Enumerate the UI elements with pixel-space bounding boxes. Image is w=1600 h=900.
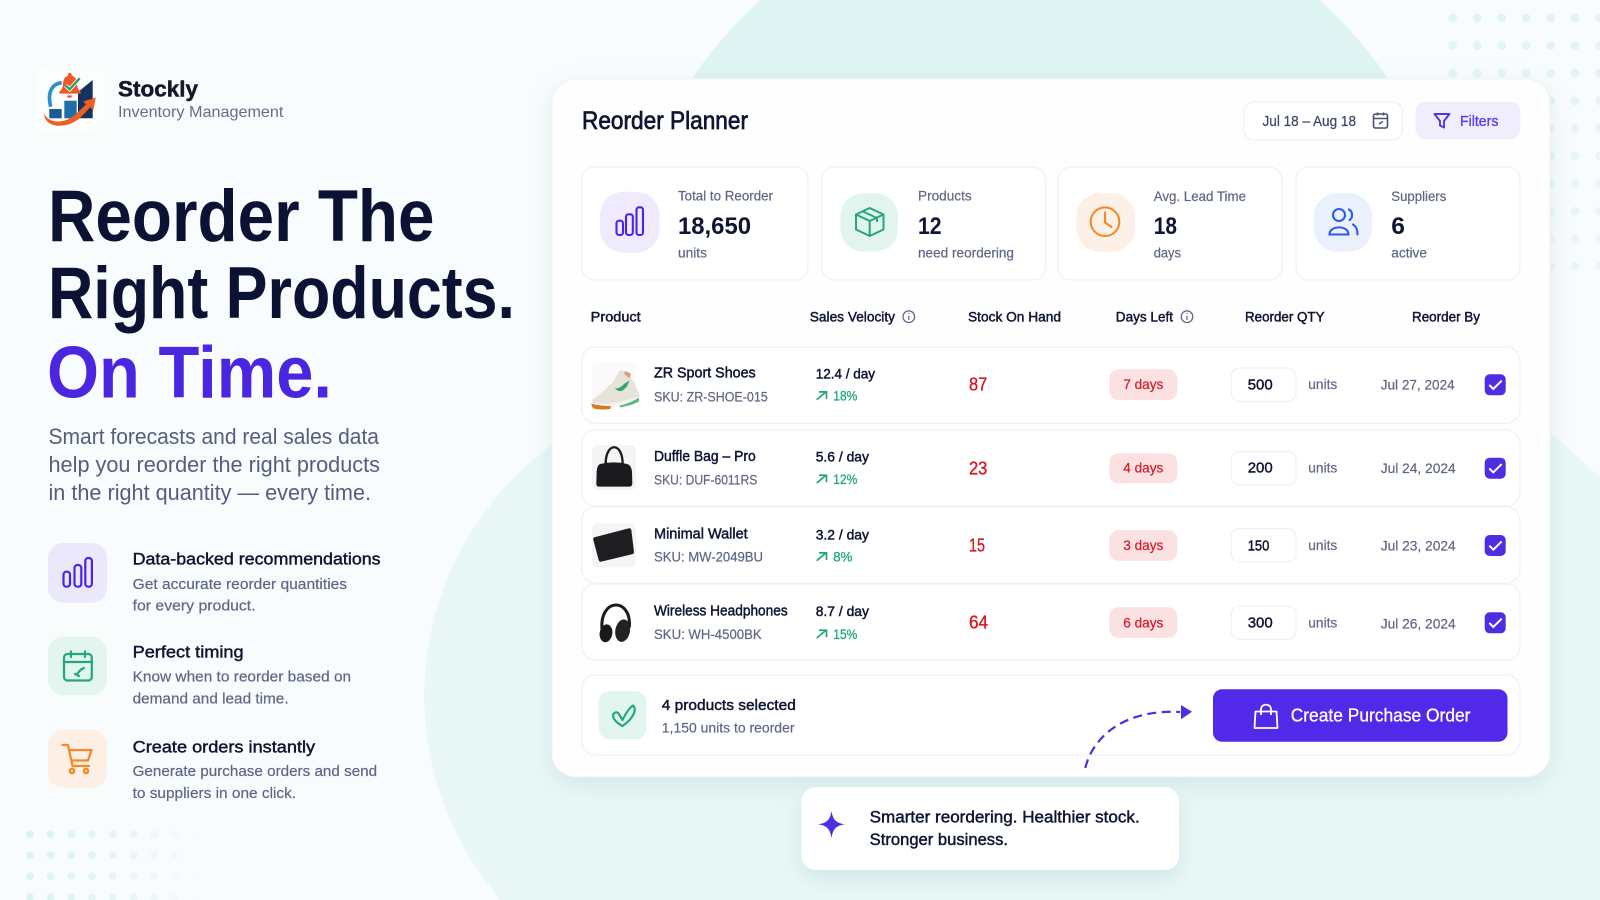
table row: Minimal Wallet: units bbox=[1308, 537, 1337, 553]
quantity input: 300 bbox=[1248, 614, 1273, 631]
headline: Reorder The bbox=[48, 174, 434, 257]
icon: info bbox=[903, 311, 915, 323]
stat card: average lead time bbox=[1058, 167, 1282, 280]
stat card: suppliers: Suppliers bbox=[1391, 189, 1447, 204]
panel: reorder planner bbox=[552, 79, 1550, 870]
table row: Minimal Wallet: Minimal Wallet bbox=[654, 526, 748, 542]
days left badge: 6 days bbox=[1123, 614, 1163, 630]
table header: Stock On Hand bbox=[968, 309, 1061, 325]
button: create purchase order: Create Purchase Order bbox=[1291, 706, 1470, 726]
intro paragraph: Smart forecasts and real sales data bbox=[48, 424, 380, 449]
table row: Wireless Headphones: SKU: WH-4500BK bbox=[654, 627, 762, 642]
brand name: Stockly bbox=[118, 77, 198, 102]
intro paragraph bbox=[48, 424, 380, 505]
stat card: total to reorder: units bbox=[678, 245, 707, 260]
table row: Minimal Wallet: 3.2 / day bbox=[816, 526, 869, 542]
table row: Wireless Headphones bbox=[582, 584, 1520, 660]
icon: calendar tile bbox=[48, 637, 107, 695]
stat card: suppliers: 6 bbox=[1391, 213, 1405, 240]
dot pattern: top right bbox=[1448, 14, 1600, 270]
icon: clock bbox=[1076, 193, 1135, 252]
icon: funnel bbox=[1434, 114, 1450, 128]
feature description: Get accurate reorder quantities bbox=[133, 576, 347, 593]
stat card: suppliers: active bbox=[1391, 245, 1427, 260]
table row: Wireless Headphones: 64 bbox=[969, 612, 988, 632]
logo tile bbox=[36, 66, 104, 132]
feature description bbox=[133, 576, 347, 615]
table row: Duffle Bag - Pro: Jul 24, 2024 bbox=[1381, 460, 1456, 476]
trend up: 8% bbox=[833, 549, 852, 565]
feature description: demand and lead time. bbox=[133, 690, 289, 707]
icon: info bbox=[1181, 311, 1193, 323]
table row: Minimal Wallet: Jul 23, 2024 bbox=[1381, 537, 1456, 553]
days left badge bbox=[1109, 453, 1177, 483]
quantity input bbox=[1231, 452, 1296, 485]
table header bbox=[591, 309, 1480, 325]
callout: smarter reordering bbox=[802, 787, 1179, 870]
icon: bar chart tile bbox=[48, 543, 107, 603]
button: create purchase order bbox=[1213, 689, 1508, 742]
callout text bbox=[870, 809, 1140, 849]
table row: Duffle Bag - Pro: 23 bbox=[969, 458, 987, 478]
table row: Duffle Bag - Pro bbox=[582, 430, 1520, 506]
table row: Wireless Headphones: Jul 26, 2024 bbox=[1381, 615, 1456, 631]
feature: perfect timing bbox=[48, 637, 351, 707]
icon: box bbox=[840, 193, 898, 252]
table header: Sales Velocity bbox=[810, 309, 895, 325]
trend up bbox=[817, 471, 857, 487]
checkbox bbox=[1485, 374, 1506, 395]
filters button bbox=[1415, 102, 1520, 139]
stat card: average lead time: 18 bbox=[1154, 213, 1177, 240]
table row: ZR Sport Shoes bbox=[582, 347, 1520, 423]
icon: bar chart bbox=[600, 192, 660, 253]
feature description bbox=[133, 669, 351, 707]
brand tagline: Inventory Management bbox=[118, 104, 284, 121]
table row: ZR Sport Shoes: 12.4 / day bbox=[816, 365, 875, 381]
callout text: Smarter reordering. Healthier stock. bbox=[870, 809, 1140, 827]
stat card: products bbox=[822, 167, 1046, 280]
feature description bbox=[133, 763, 377, 802]
feature description: to suppliers in one click. bbox=[133, 785, 296, 802]
table row: ZR Sport Shoes: 87 bbox=[969, 375, 987, 395]
arrow: dashed to purchase button bbox=[1085, 705, 1192, 768]
days left badge: 4 days bbox=[1123, 459, 1163, 475]
stat card: products: 12 bbox=[918, 213, 942, 240]
quantity input bbox=[1231, 368, 1296, 401]
days left badge bbox=[1109, 530, 1177, 561]
stat card: total to reorder: 18,650 bbox=[678, 213, 751, 240]
intro paragraph: help you reorder the right products bbox=[48, 452, 380, 477]
icon: shopping bag bbox=[1254, 705, 1278, 728]
table row: Minimal Wallet bbox=[582, 507, 1520, 583]
table row: Wireless Headphones: units bbox=[1308, 614, 1337, 630]
table row: Minimal Wallet: 15 bbox=[969, 536, 985, 556]
icon: sparkle bbox=[818, 811, 845, 838]
checkbox bbox=[1485, 612, 1506, 633]
table row: ZR Sport Shoes: Jul 27, 2024 bbox=[1381, 376, 1455, 392]
table header: Reorder By bbox=[1412, 309, 1480, 325]
feature description: Know when to reorder based on bbox=[133, 669, 351, 686]
feature description: Generate purchase orders and send bbox=[133, 763, 377, 780]
days left badge: 7 days bbox=[1123, 376, 1163, 392]
trend up bbox=[817, 388, 857, 404]
headline bbox=[47, 174, 515, 414]
table row: Duffle Bag - Pro: 5.6 / day bbox=[816, 449, 869, 465]
feature title: Data-backed recommendations bbox=[133, 549, 381, 568]
panel card bbox=[552, 79, 1550, 777]
headline: On Time. bbox=[47, 330, 332, 414]
quantity input: 500 bbox=[1248, 376, 1273, 393]
icon: people bbox=[1314, 193, 1372, 252]
selection summary bar: 4 products selected bbox=[662, 698, 796, 714]
product image: wallet bbox=[592, 523, 636, 567]
table row: Duffle Bag - Pro: SKU: DUF-6011RS bbox=[654, 472, 757, 487]
feature title: Create orders instantly bbox=[133, 737, 316, 756]
checkbox bbox=[1485, 535, 1506, 556]
table row: Wireless Headphones: 8.7 / day bbox=[816, 603, 869, 619]
feature: create orders instantly bbox=[48, 730, 377, 802]
table header: Days Left bbox=[1116, 309, 1173, 325]
quantity input bbox=[1231, 529, 1296, 562]
feature: data-backed recommendations bbox=[48, 543, 381, 615]
background shape: top teal circle bbox=[621, 0, 1459, 731]
table row: Minimal Wallet: SKU: MW-2049BU bbox=[654, 550, 763, 565]
checkbox bbox=[1485, 458, 1506, 479]
table header: Reorder QTY bbox=[1245, 309, 1325, 325]
quantity input: 150 bbox=[1248, 537, 1269, 554]
panel title: Reorder Planner bbox=[582, 107, 748, 135]
stat card: suppliers bbox=[1296, 167, 1520, 280]
date range control: Jul 18 – Aug 18 bbox=[1262, 114, 1356, 130]
stat card: total to reorder: Total to Reorder bbox=[678, 189, 773, 204]
days left badge bbox=[1109, 607, 1177, 638]
stat card: total to reorder bbox=[582, 167, 808, 280]
trend up: 18% bbox=[833, 388, 857, 404]
trend up: 12% bbox=[833, 471, 857, 487]
stat card: average lead time: Avg. Lead Time bbox=[1154, 189, 1246, 204]
product image: headphones bbox=[598, 605, 632, 643]
logo mark: bars, bell and arrow bbox=[44, 73, 96, 126]
icon: calendar bbox=[1374, 112, 1388, 128]
selection summary bar: 1,150 units to reorder bbox=[662, 720, 795, 735]
table row: Wireless Headphones: Wireless Headphones bbox=[654, 604, 788, 620]
trend up: 15% bbox=[833, 626, 857, 642]
quantity input: 200 bbox=[1248, 460, 1273, 477]
date range control bbox=[1244, 102, 1402, 140]
callout text: Stronger business. bbox=[870, 831, 1008, 849]
days left badge: 3 days bbox=[1123, 537, 1163, 553]
table row: Duffle Bag - Pro: Duffle Bag – Pro bbox=[654, 449, 756, 465]
product image: shoe bbox=[591, 362, 640, 410]
trend up bbox=[817, 549, 852, 565]
table row: ZR Sport Shoes: SKU: ZR-SHOE-015 bbox=[654, 390, 768, 405]
table header: Product bbox=[591, 309, 641, 325]
selection summary bar bbox=[582, 675, 1520, 768]
days left badge bbox=[1109, 369, 1177, 400]
brand logo lockup bbox=[36, 66, 284, 132]
dot pattern: bottom left bbox=[26, 830, 158, 900]
table row: ZR Sport Shoes: units bbox=[1308, 376, 1337, 392]
table row: Duffle Bag - Pro: units bbox=[1308, 460, 1337, 476]
filters button: Filters bbox=[1460, 114, 1498, 130]
stat card: average lead time: days bbox=[1154, 245, 1181, 260]
quantity input bbox=[1231, 606, 1296, 639]
product image: bag bbox=[592, 445, 636, 490]
feature title: Perfect timing bbox=[133, 643, 244, 662]
stat card: products: Products bbox=[918, 189, 972, 204]
stat card: products: need reordering bbox=[918, 245, 1014, 260]
trend up bbox=[817, 626, 857, 642]
icon: check tile bbox=[599, 691, 646, 739]
feature description: for every product. bbox=[133, 598, 256, 615]
background shape: lower teal blob bbox=[424, 425, 1600, 900]
headline: Right Products. bbox=[48, 251, 515, 334]
table row: ZR Sport Shoes: ZR Sport Shoes bbox=[654, 365, 756, 381]
icon: cart tile bbox=[48, 730, 107, 788]
intro paragraph: in the right quantity — every time. bbox=[48, 480, 371, 505]
